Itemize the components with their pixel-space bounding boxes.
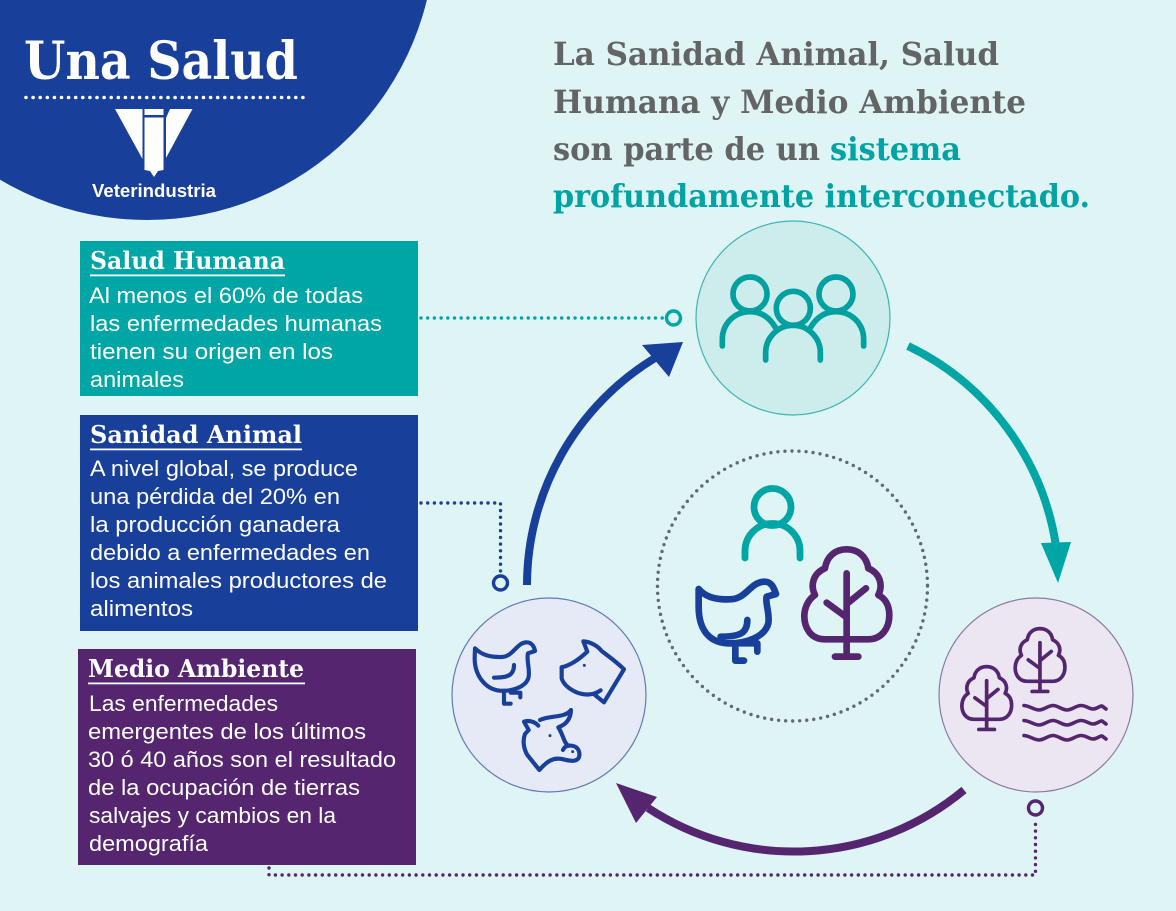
text: Salud Humana: [89, 283, 382, 392]
text: Medio Ambiente: [88, 691, 396, 856]
headline: son parte de un: [553, 130, 820, 168]
heading: Sanidad Animal: Sanidad Animal: [90, 420, 302, 449]
text: Sanidad Animal: A nivel global, se produce: [90, 456, 358, 481]
arrow: teal, humans to environment: [908, 346, 1071, 583]
connector: Salud Humana: [421, 311, 680, 325]
text: Salud Humana: animales: [90, 367, 184, 392]
text: Medio Ambiente: demografía: [89, 831, 208, 856]
circle: humans: [696, 221, 890, 415]
text: Sanidad Animal: los animales productores de: [90, 568, 387, 593]
icon: hen: [699, 582, 776, 661]
circle: environment: [939, 598, 1133, 792]
text: Medio Ambiente: Las enfermedades: [89, 691, 278, 716]
headline: La Sanidad Animal, Salud: [553, 35, 999, 73]
text: Sanidad Animal: debido a enfermedades en: [90, 540, 370, 565]
icons: hen, pig, cow: [475, 641, 624, 770]
text: Salud Humana: Al menos el 60% de todas: [89, 283, 363, 308]
text: Salud Humana: las enfermedades humanas: [90, 311, 382, 336]
text: Medio Ambiente: 30 ó 40 años son el resultado: [88, 747, 396, 772]
text: Medio Ambiente: emergentes de los últimos: [88, 719, 366, 744]
header badge: Una Salud: [0, 0, 435, 220]
arrow: purple, environment to animals: [616, 783, 964, 852]
icon: cow: [524, 710, 579, 770]
icon: tree, left: [962, 667, 1012, 729]
text: Sanidad Animal: una pérdida del 20% en: [90, 484, 340, 509]
icon: tree: [804, 549, 889, 657]
text: Salud Humana: tienen su origen en los: [90, 339, 333, 364]
text: Medio Ambiente: de la ocupación de tierras: [88, 775, 360, 800]
center: dotted circle with One Health icons: [658, 451, 928, 721]
icon: pig: [562, 641, 624, 702]
headline: [553, 35, 1090, 215]
panel: Medio Ambiente: [78, 649, 416, 865]
icon: water waves: [1024, 706, 1106, 740]
logo: Veterindustria: [115, 109, 192, 177]
text: Medio Ambiente: salvajes y cambios en la: [89, 803, 336, 828]
logo wordmark: Veterindustria: [92, 181, 217, 201]
headline: Humana y Medio Ambiente: [553, 83, 1026, 121]
arrow: blue, animals to humans: [527, 342, 683, 585]
icon: tree, right: [1015, 629, 1065, 691]
connector: Sanidad Animal: [421, 503, 508, 590]
title: Una Salud: Una Salud: [24, 31, 298, 92]
panel: Sanidad Animal: [80, 415, 418, 631]
text: Sanidad Animal: alimentos: [90, 596, 193, 621]
icon: person: [745, 488, 800, 558]
icon: hen: [475, 642, 535, 704]
headline: profundamente interconectado.: [553, 177, 1090, 215]
icon: three people: [722, 277, 864, 360]
circle: animals: [452, 598, 646, 792]
headline: sistema: [830, 130, 961, 168]
text: Sanidad Animal: la producción ganadera: [90, 512, 341, 537]
connector: Medio Ambiente: [269, 801, 1042, 875]
text: Sanidad Animal: [90, 456, 387, 621]
panel: Salud Humana: [80, 241, 418, 396]
heading: Salud Humana: Salud Humana: [90, 246, 285, 275]
heading: Medio Ambiente: Medio Ambiente: [88, 654, 304, 683]
